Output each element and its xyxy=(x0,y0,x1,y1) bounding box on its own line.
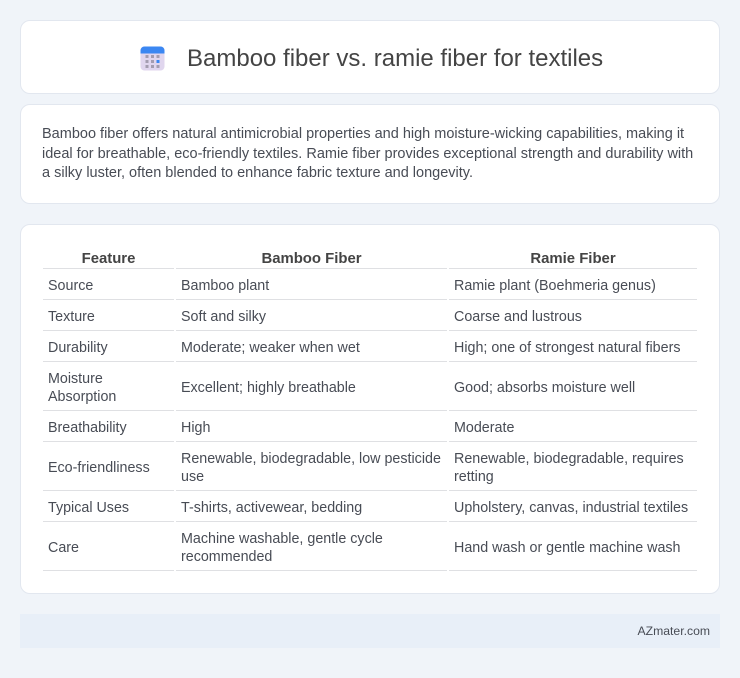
footer credit: AZmater.com xyxy=(638,624,710,638)
row: care xyxy=(48,531,680,565)
row: source xyxy=(48,278,656,294)
comparison table: retting xyxy=(454,469,494,485)
row: eco-friendliness xyxy=(48,451,684,485)
table header xyxy=(82,251,616,267)
row: texture xyxy=(48,309,582,325)
comparison table: Machine washable, gentle cycle xyxy=(181,531,383,547)
comparison table: Hand wash or gentle machine wash xyxy=(454,540,680,556)
comparison table: T-shirts, activewear, bedding xyxy=(181,500,362,516)
comparison table: Feature xyxy=(82,251,135,267)
comparison table: use xyxy=(181,469,204,485)
comparison table: recommended xyxy=(181,549,272,565)
comparison table: Moderate; weaker when wet xyxy=(181,340,360,356)
row: moisture absorption xyxy=(48,371,635,405)
comparison table: Good; absorbs moisture well xyxy=(454,380,635,396)
comparison table: Bamboo Fiber xyxy=(261,251,362,267)
comparison table: Breathability xyxy=(48,420,127,436)
comparison table: Eco-friendliness xyxy=(48,460,150,476)
comparison table: Source xyxy=(48,278,93,294)
comparison table: Soft and silky xyxy=(181,309,266,325)
comparison table: Renewable, biodegradable, low pesticide xyxy=(181,451,441,467)
comparison table: Upholstery, canvas, industrial textiles xyxy=(454,500,688,516)
comparison table: High; one of strongest natural fibers xyxy=(454,340,680,356)
heading: Bamboo fiber vs. ramie fiber for textiles xyxy=(187,45,603,72)
footer bar xyxy=(20,614,720,648)
comparison table: Durability xyxy=(48,340,108,356)
comparison table: Renewable, biodegradable, requires xyxy=(454,451,684,467)
summary paragraph: Bamboo fiber offers natural antimicrobial properties and high moisture-wicking capabilities, making it xyxy=(42,126,684,142)
comparison table: Excellent; highly breathable xyxy=(181,380,356,396)
icon: calendar xyxy=(140,46,164,70)
row: durability xyxy=(48,340,680,356)
comparison table: High xyxy=(181,420,210,436)
summary paragraph: a silky luster, often blended to enhance fabric texture and longevity. xyxy=(42,165,473,181)
comparison table: Absorption xyxy=(48,389,116,405)
comparison table: Moisture xyxy=(48,371,103,387)
comparison table: Moderate xyxy=(454,420,514,436)
row: typical uses xyxy=(48,500,688,516)
comparison table: Ramie plant (Boehmeria genus) xyxy=(454,278,656,294)
panel: comparison table xyxy=(20,224,720,594)
comparison table: Typical Uses xyxy=(48,500,129,516)
comparison table: Care xyxy=(48,540,79,556)
comparison table: Ramie Fiber xyxy=(530,251,616,267)
summary paragraph: ideal for breathable, eco-friendly textiles. Ramie fiber provides exceptional strength and durability with xyxy=(42,146,693,162)
comparison table: Texture xyxy=(48,309,95,325)
summary paragraph xyxy=(42,126,693,181)
comparison table: Bamboo plant xyxy=(181,278,269,294)
panel: summary text xyxy=(20,104,720,204)
row: breathability xyxy=(48,420,514,436)
panel: title xyxy=(20,20,720,94)
comparison table: Coarse and lustrous xyxy=(454,309,582,325)
